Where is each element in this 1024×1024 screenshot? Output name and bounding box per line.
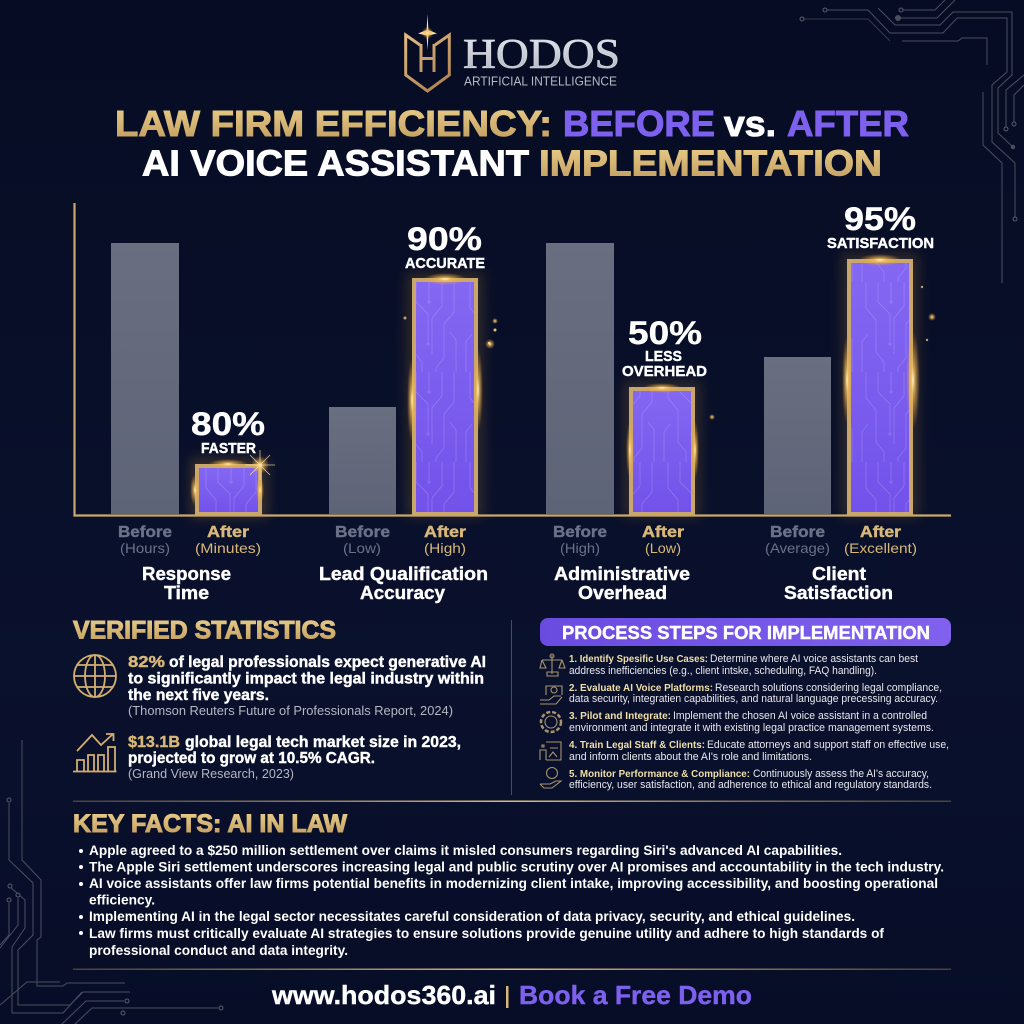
axis labels: before [765,524,830,556]
category: administrative overhead: Overhead [578,583,667,603]
footer call to action: Book a Free Demo [519,980,752,1010]
title: LAW FIRM EFFICIENCY: [115,103,552,144]
axis labels: before: Before [335,524,390,541]
bar: client satisfaction after [841,253,936,517]
logo tagline: ARTIFICIAL INTELLIGENCE [464,74,617,88]
axis labels: after: (High) [424,540,466,556]
icon: training board [540,742,561,760]
icon: gear [541,712,561,732]
title: IMPLEMENTATION [539,142,882,184]
bar: administrative overhead after [623,381,715,517]
title: AI VOICE ASSISTANT [142,142,529,184]
group: administrative overhead [546,243,715,603]
circuit decoration: bottom left [0,740,223,1024]
panel: verified statistics [73,616,486,781]
statistic: 82 percent: (Thomson Reuters Future of Professionals Report, 2024) [128,703,453,718]
statistic: 82 percent: the next five years. [128,687,269,704]
group: lead qualification accuracy [319,221,498,603]
heading pill: process steps: PROCESS STEPS FOR IMPLEMENTATION [562,623,930,643]
statistic: market size [128,734,461,781]
category: client satisfaction: Client [812,564,866,584]
axis labels: before [553,524,607,556]
bar: administrative overhead before [546,243,614,514]
title: vs. [724,103,776,144]
category: response time [142,564,231,603]
step 2: Research solutions considering legal compliance, [715,682,942,694]
step 4: 4. Train Legal Staff & Clients: [569,739,705,751]
category: client satisfaction [784,564,893,603]
icon: growth chart [73,734,116,772]
axis labels: after: After [642,524,684,541]
bar chart [74,201,951,603]
statistic: market size: $13.1B [128,734,180,751]
step 2 [569,682,942,705]
statistic: 82 percent [128,654,486,718]
bar: response time before [111,243,179,514]
bar: client satisfaction before [764,357,831,514]
category: response time: Response [142,564,231,584]
value: 50% less overhead: OVERHEAD [622,364,707,380]
bullet list: key facts: The Apple Siri settlement underscores increasing legal and public scrutiny over AI promises and accountability in the tech industry. [89,858,944,874]
group: response time [111,243,275,603]
axis labels: after: (Minutes) [195,540,261,556]
category: lead qualification accuracy [319,564,488,603]
axis labels: after [844,524,917,556]
value: 90% accurate: ACCURATE [405,256,485,272]
footer call to action [271,980,752,1010]
axis labels: before: (Average) [765,540,830,556]
bullet list: key facts [79,842,944,958]
value: 95% satisfaction: SATISFACTION [827,236,934,252]
category: lead qualification accuracy: Accuracy [360,583,445,603]
value: 50% less overhead: LESS [645,349,682,365]
step 5 [569,768,932,791]
bar: lead qualification before [329,407,396,514]
axis labels: before [335,524,390,556]
group: client satisfaction [764,201,936,603]
axis labels: before: Before [553,524,607,541]
value: 80% faster [191,406,265,457]
axis labels: before: Before [118,524,172,541]
statistic: market size: global legal tech market size in 2023, [185,734,461,751]
icon: scales [540,654,565,676]
step 2: data security, integratien capabilities, and natural language precessing accuracy. [569,693,938,705]
axis labels: after: (Low) [645,540,681,556]
step 3: environment and integrate it with existing legal practice management systems. [569,722,934,734]
axis labels: before: Before [770,524,825,541]
axis labels: before: (Hours) [120,540,170,556]
heading: key facts: KEY FACTS: AI IN LAW [73,810,347,838]
step 5: 5. Monitor Performance & Compliance: [569,768,750,780]
statistic: 82 percent: 82% [128,654,165,671]
step 5: efficiency, user satisfaction, and adherence to ethical and regulatory standards. [569,779,932,791]
heading: verified statistics: VERIFIED STATISTICS [73,616,336,644]
step 1: 1. Identify Spesific Use Cases: [569,653,708,665]
axis labels: before [118,524,172,556]
axis labels: after [642,524,684,556]
circuit decoration: top right [800,0,1024,283]
panel: process steps [540,618,951,791]
bullet list: key facts: professional conduct and data integrity. [89,942,348,958]
icon: hand with coin [540,768,561,788]
step 4: Educate attorneys and support staff on effective use, [707,739,949,751]
bullet list: key facts: Implementing AI in the legal sector necessitates careful consideration of data privacy, security, and ethical guidelines. [89,908,855,924]
value: 95% satisfaction [827,201,934,252]
bullet list: key facts: Law firms must critically evaluate AI strategies to ensure solutions provide genuine utility and adhere to high standards of [89,925,884,941]
statistic: 82 percent: to significantly impact the legal industry within [128,670,484,688]
value: 80% faster: FASTER [201,441,257,457]
title: AFTER [787,103,909,144]
value: 50% less overhead [622,315,707,380]
bar: response time after [190,450,275,518]
category: client satisfaction: Satisfaction [784,583,893,603]
logo wordmark: HODOS [463,32,620,78]
value: 90% accurate [405,221,485,272]
logo shield mark [406,14,449,91]
bullet list: key facts: AI voice assistants offer law firms potential benefits in modernizing client intake, improving accessibility, and boosting operational [89,875,938,891]
bullet list: key facts: efficiency. [89,892,155,908]
logo [406,14,620,91]
statistic: 82 percent: of legal professionals expect generative AI [169,654,486,671]
title [115,103,909,184]
step 3: 3. Pilot and Integrate: [569,710,671,722]
category: administrative overhead: Administrative [554,564,690,584]
axis labels: after: After [424,524,466,541]
value: 50% less overhead: 50% [628,315,702,351]
bullet list: key facts: Apple agreed to a $250 million settlement over claims it misled consumers regarding Siri's advanced AI capabilities. [89,842,842,858]
step 3 [569,710,934,734]
axis labels: after: (Excellent) [844,540,917,556]
category: response time: Time [164,583,209,603]
category: lead qualification accuracy: Lead Qualification [319,564,488,584]
value: 95% satisfaction: 95% [844,201,916,237]
title: BEFORE [563,103,715,144]
step 4 [569,739,949,763]
step 4: and inform clients about the AI's role and limitations. [569,751,812,763]
axis labels: after [424,524,466,556]
value: 90% accurate: 90% [407,221,482,257]
icon: globe [74,655,116,697]
axis labels: after: After [207,524,249,541]
footer call to action: www.hodos360.ai [271,980,496,1010]
step 1 [569,653,918,677]
step 3: Implement the chosen AI voice assistant in a controlled [673,710,927,722]
step 1: Determine where AI voice assistants can best [710,653,918,665]
heading pill: process steps [540,618,951,646]
axis labels: before: (High) [560,540,600,556]
axis labels: after [195,524,261,556]
panel: key facts [73,810,944,958]
category: administrative overhead [554,564,690,603]
chart axes [74,203,951,516]
axis labels: after: After [860,524,901,541]
statistic: market size: (Grand View Research, 2023) [128,766,294,781]
bar: lead qualification after [404,272,498,517]
axis labels: before: (Low) [343,540,381,556]
step 5: Continuously assess the AI's accuracy, [753,768,929,780]
icon: hand with platform [540,686,562,704]
step 1: address inefficiencies (e.g., client intske, scheduling, FAQ handling). [569,665,877,677]
value: 80% faster: 80% [191,406,265,442]
statistic: market size: projected to grow at 10.5% CAGR. [128,750,375,767]
step 2: 2. Evaluate AI Voice Platforms: [569,682,713,694]
